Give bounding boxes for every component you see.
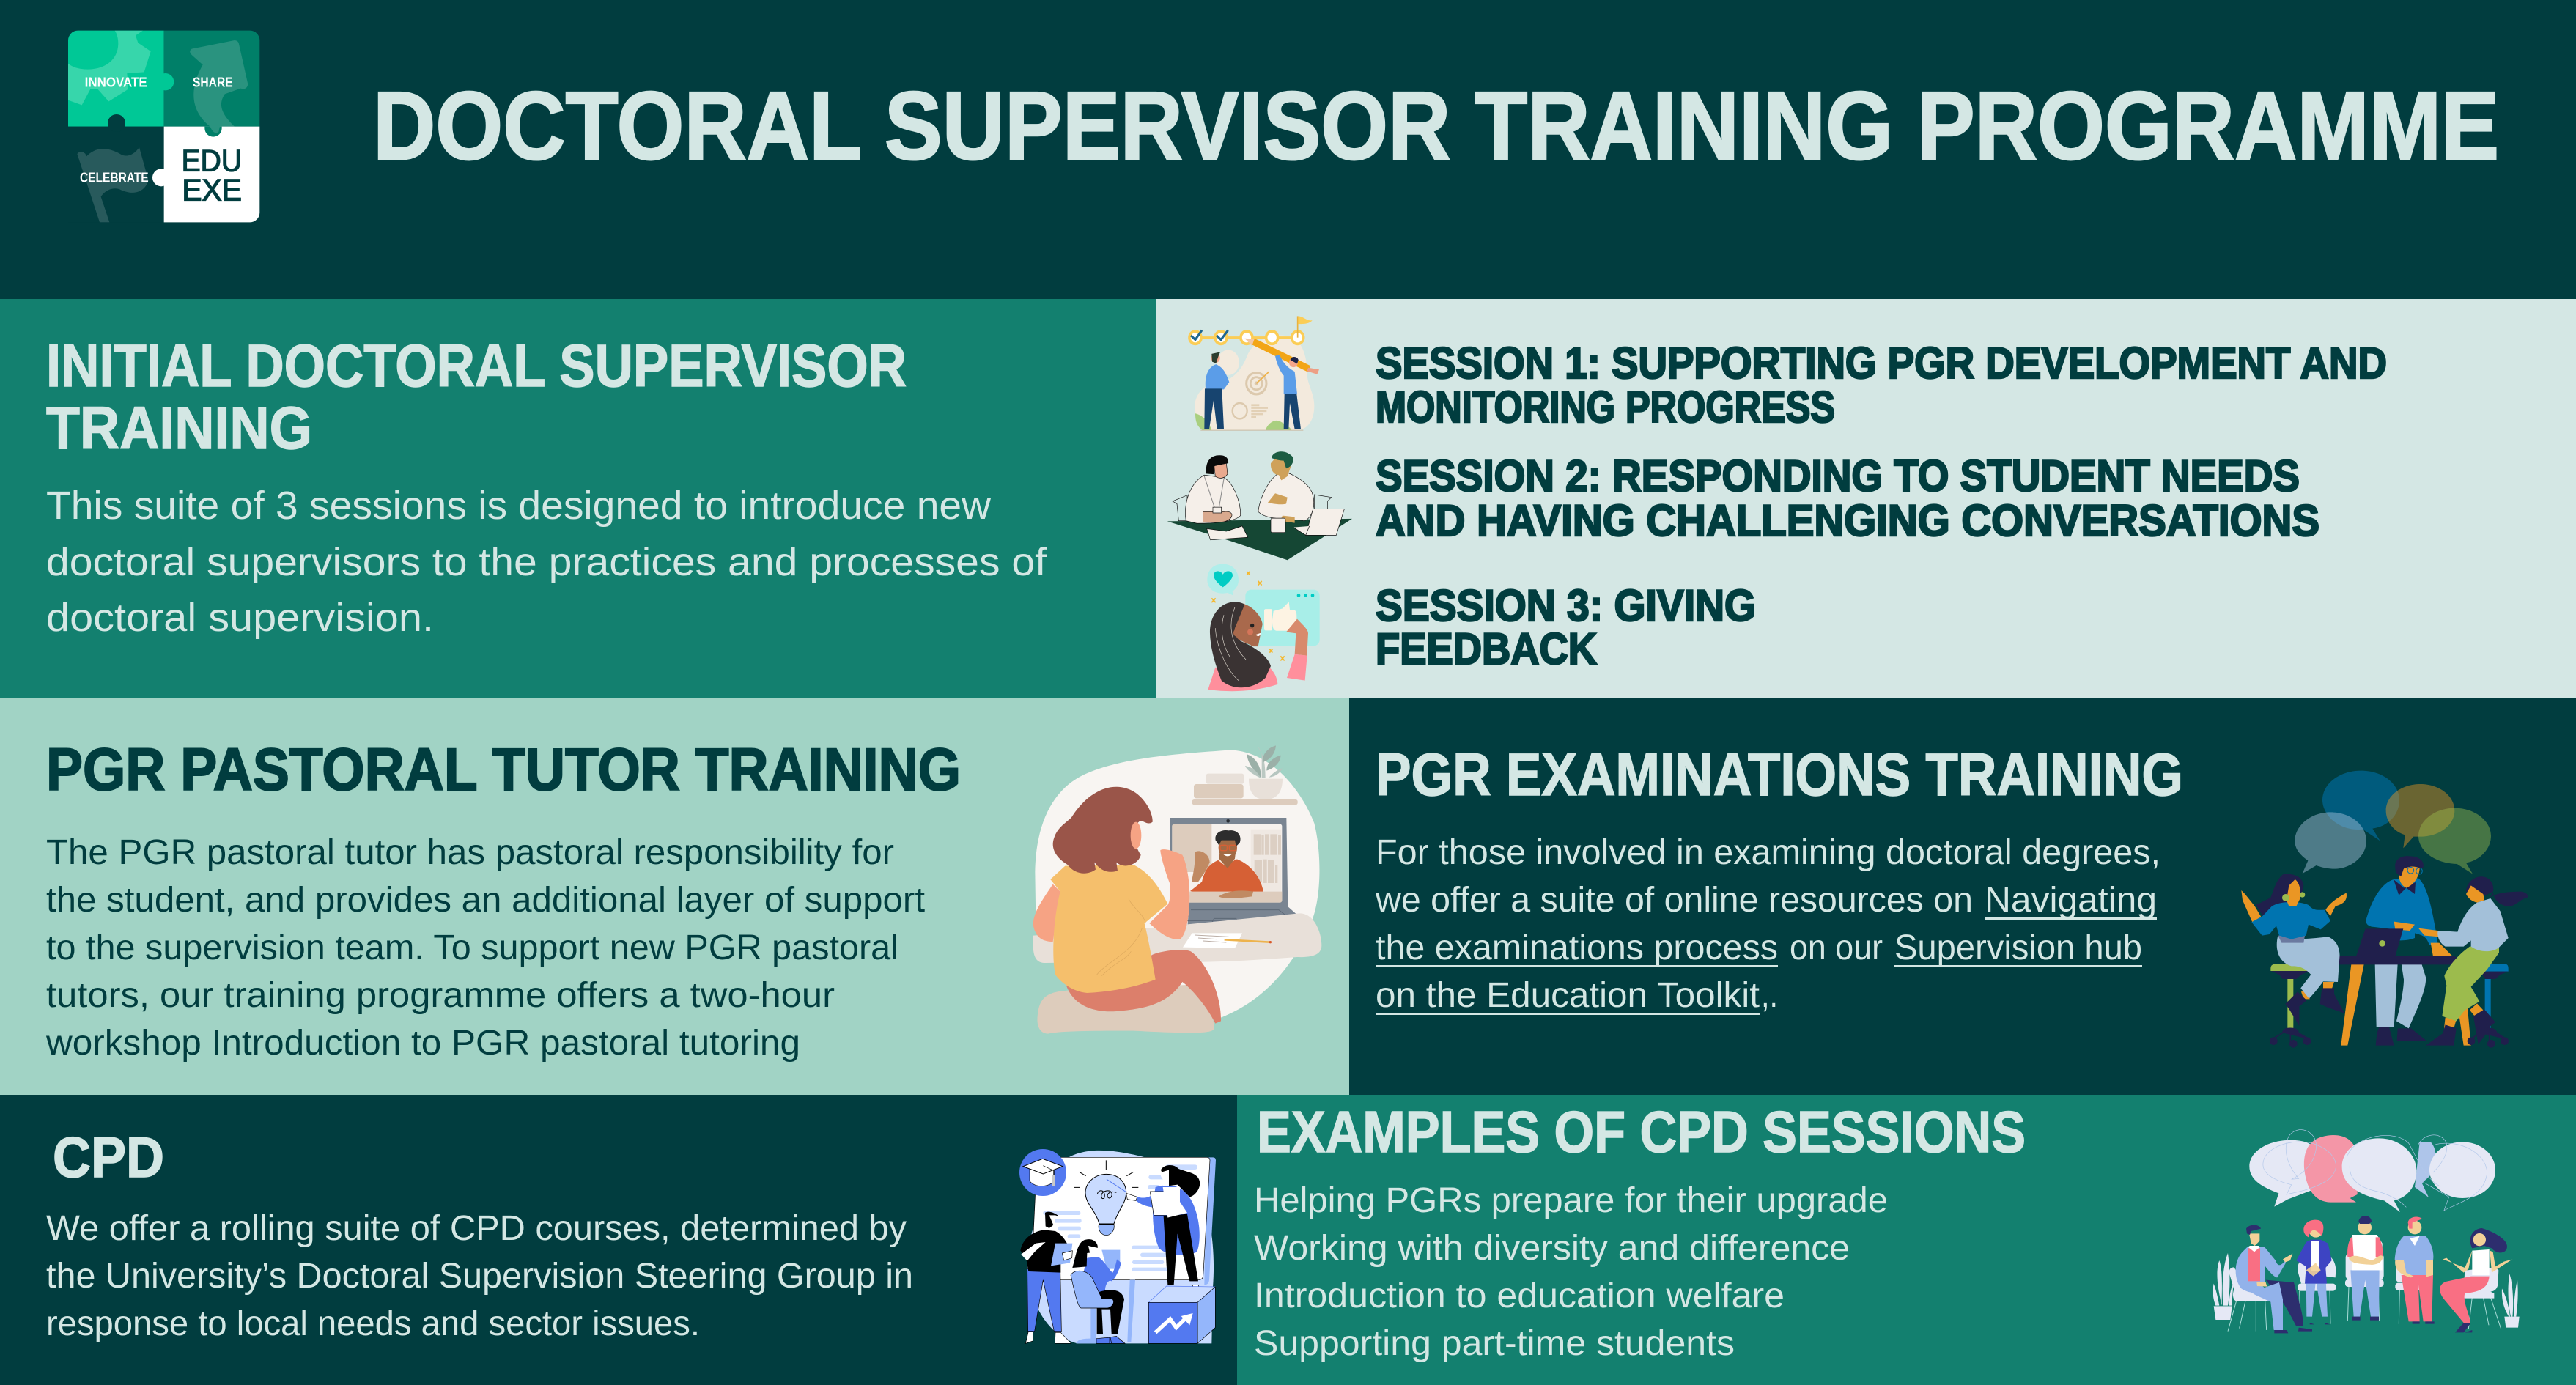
heading: CPD: CPD [53, 1125, 164, 1189]
text: pastoral tutor description: The PGR pastoral tutor has pastoral responsibility for [46, 833, 894, 872]
text: initial training description: This suite of 3 sessions is designed to introduce new [46, 484, 992, 528]
text: examinations description with links: Supervision hub [1894, 928, 2142, 967]
man with red hair [2395, 1217, 2435, 1324]
panel: initial doctoral supervisor training [0, 299, 1156, 698]
text: session 2 title: SESSION 2: RESPONDING TO STUDENT NEEDS [1376, 451, 2300, 501]
panel: PGR pastoral tutor training [0, 698, 1349, 1095]
icon: session 1 milestone illustration [1189, 316, 1319, 430]
text: CPD description: We offer a rolling suite of CPD courses, determined by [46, 1209, 907, 1248]
text: pastoral tutor description: workshop Introduction to PGR pastoral tutoring [45, 1024, 800, 1063]
icon: group conversation illustration [2213, 1130, 2520, 1333]
text: session 1 title: SESSION 1: SUPPORTING PGR DEVELOPMENT AND [1376, 339, 2387, 388]
woman with clipboard [1126, 1165, 1203, 1299]
plants [2213, 1253, 2520, 1328]
text: examinations description with links: on the Education Toolkit [1376, 976, 1760, 1015]
text: examinations description with links: Navigating [1985, 881, 2157, 920]
woman with dark hair [2440, 1228, 2512, 1332]
panel: PGR examinations training [1349, 698, 2576, 1095]
text: session 1 title: MONITORING PROGRESS [1376, 383, 1835, 432]
icon: discussion at table illustration [2241, 771, 2528, 1048]
text: examinations description with links: on our [1790, 928, 1883, 967]
text: examinations description with links: For those involved in examining doctoral degrees, [1376, 833, 2160, 872]
text: pastoral tutor description: the student, and provides an additional layer of support [46, 881, 925, 920]
text: session 3 title: SESSION 3: GIVING [1376, 581, 1756, 630]
panel: examples of CPD sessions [1237, 1095, 2576, 1385]
text: pastoral tutor description: tutors, our training programme offers a two-hour [46, 976, 835, 1015]
text: initial training description: doctoral supervision. [46, 596, 434, 640]
text: examinations description with links: ,. [1761, 976, 1778, 1015]
left stool [2270, 964, 2311, 1048]
panel: CPD [0, 1095, 1237, 1385]
text: examples list: Helping PGRs prepare for their upgrade [1254, 1181, 1888, 1220]
icon: idea team illustration [1019, 1149, 1216, 1343]
man in middle [2347, 1216, 2383, 1321]
text: examples list: Introduction to education welfare [1254, 1277, 1785, 1315]
text: session 3 title: FEEDBACK [1376, 624, 1597, 673]
text: examples list: Working with diversity and difference [1254, 1229, 1850, 1268]
icon: video call illustration [1033, 745, 1321, 1034]
speech bubbles [2249, 1130, 2495, 1212]
icon: EDU EXE puzzle logo: CELEBRATE [80, 169, 149, 185]
panel: sessions list [1156, 299, 2576, 698]
icon: EDU EXE puzzle logo [68, 31, 259, 222]
text: examples list [1254, 1181, 1888, 1363]
text: initial training description: doctoral supervisors to the practices and processes of [46, 540, 1047, 584]
text: session 2 title [1376, 451, 2319, 545]
text: CPD description [46, 1209, 913, 1343]
heading: examples: EXAMPLES OF CPD SESSIONS [1257, 1099, 2026, 1164]
heading: initial training [46, 333, 907, 462]
text: initial training description [46, 484, 1047, 640]
panel: header [68, 31, 2496, 223]
text: pastoral tutor description [45, 833, 925, 1063]
right stool [2468, 964, 2509, 1048]
heading: pastoral tutor: PGR PASTORAL TUTOR TRAINING [46, 736, 961, 803]
heading: initial training: INITIAL DOCTORAL SUPERVISOR [46, 333, 907, 399]
text: examinations description with links [1375, 833, 2160, 1015]
text: CPD description: the University’s Doctoral Supervision Steering Group in [46, 1257, 913, 1296]
box with chart [1148, 1286, 1215, 1343]
icon: EDU EXE puzzle logo: SHARE [193, 74, 233, 89]
text: session 2 title: AND HAVING CHALLENGING CONVERSATIONS [1376, 496, 2319, 545]
icon: session 2 conversation illustration [1167, 451, 1352, 560]
text: CPD description: response to local needs and sector issues. [46, 1304, 700, 1343]
text: examinations description with links: the examinations process [1376, 928, 1778, 967]
text: session 1 title [1376, 339, 2387, 432]
woman red hair [2296, 1220, 2332, 1324]
heading: examinations: PGR EXAMINATIONS TRAINING [1376, 742, 2183, 808]
text: examinations description with links: we offer a suite of online resources on [1375, 881, 1973, 920]
icon: EDU EXE puzzle logo: EDU [182, 144, 242, 177]
icon: session 3 feedback illustration [1207, 564, 1320, 691]
speech bubbles [2295, 771, 2491, 874]
text: session 3 title [1376, 581, 1756, 673]
text: pastoral tutor description: to the supervision team. To support new PGR pastoral [46, 928, 898, 967]
seated woman [1071, 1239, 1125, 1343]
icon: EDU EXE puzzle logo: INNOVATE [85, 74, 147, 89]
heading: initial training: TRAINING [46, 395, 312, 462]
icon: EDU EXE puzzle logo: EXE [182, 173, 242, 207]
text: examples list: Supporting part-time students [1254, 1324, 1735, 1363]
man with glasses [2236, 1225, 2312, 1333]
bearded man [1020, 1212, 1072, 1343]
